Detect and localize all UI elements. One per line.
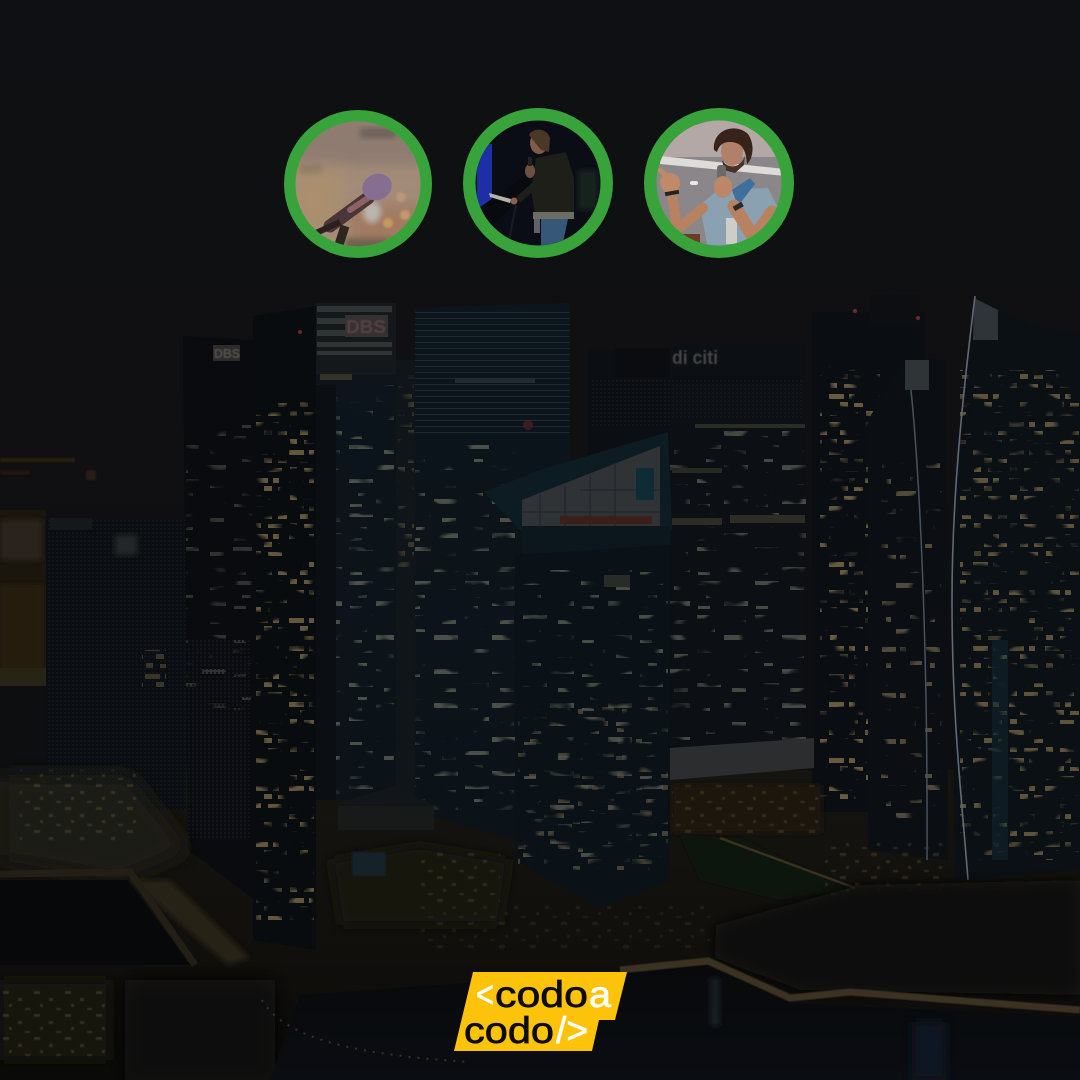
building: tower behind centre right [588, 348, 672, 530]
logo: codo a codo [454, 972, 627, 1051]
logo text: close bracket: /> [556, 1010, 588, 1051]
water and promenade [262, 961, 1080, 1080]
building: tower E [415, 303, 570, 840]
ground and roads behind the towers [0, 770, 1080, 1080]
speaker photo: microphone [284, 110, 432, 258]
speaker photo: man on stage [463, 108, 613, 258]
building: slanted glass atrium [484, 432, 672, 566]
sign: DBS top: DBS [346, 317, 386, 337]
building: podium [335, 738, 814, 830]
building: tower A [183, 336, 255, 900]
speaker photo: man with microphone [644, 108, 794, 258]
logo text: codo line 1: codo [495, 974, 588, 1015]
building: tower B [253, 306, 316, 950]
left waterfront lights [0, 458, 96, 778]
building: curved tower L [950, 295, 1080, 880]
logo text: codo line 2: codo [464, 1010, 554, 1051]
sign: citi: di citi [672, 348, 718, 369]
building: tower C top strip [316, 303, 418, 820]
ground details [0, 770, 1080, 1080]
logo text: a: a [589, 974, 611, 1015]
building: tower J [812, 295, 925, 812]
building: citi tower [670, 345, 806, 745]
city skyline photo [0, 295, 1080, 1080]
sign: DBS left: DBS [214, 346, 240, 361]
building: front tower G [515, 545, 670, 908]
logo text: open bracket: < [476, 974, 494, 1015]
building: left low block [46, 518, 186, 810]
building: tower K [868, 358, 948, 860]
